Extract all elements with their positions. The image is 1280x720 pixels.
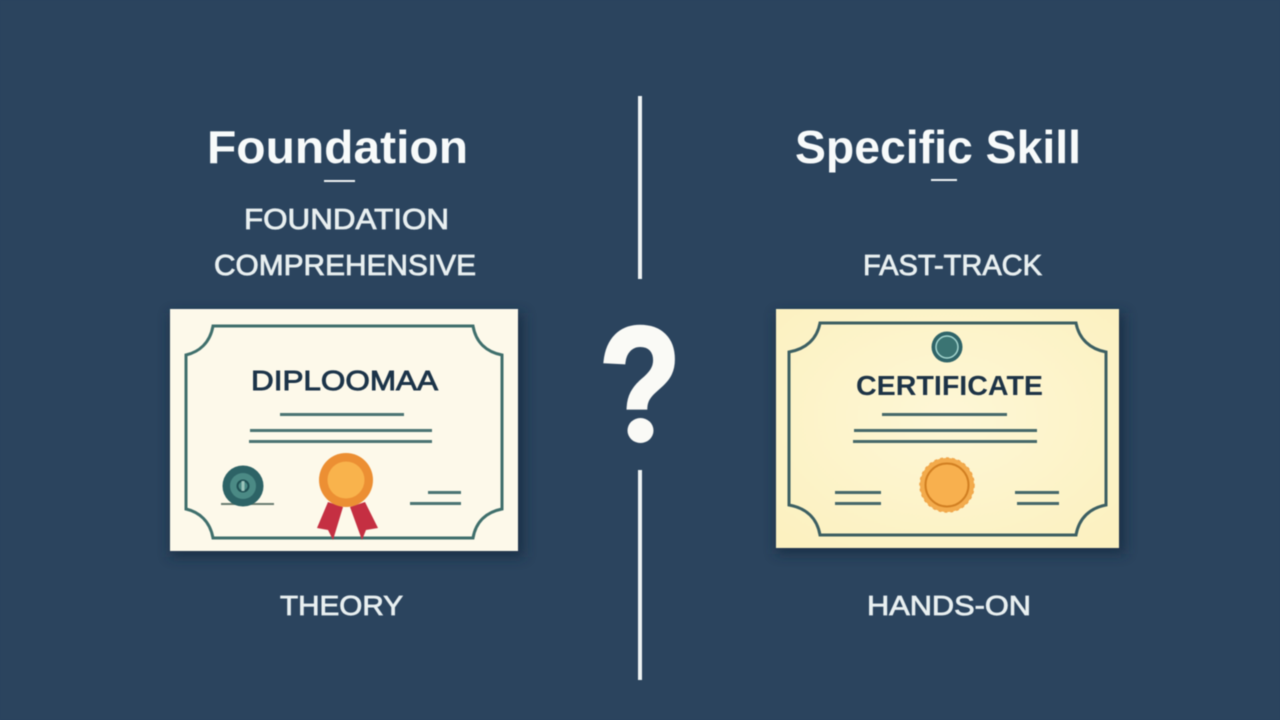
icon: question mark: ? <box>599 293 681 477</box>
icon: orange seal <box>920 458 974 512</box>
panel: certificate card <box>776 309 1125 554</box>
signature lines <box>835 491 1059 505</box>
certificate ornate border <box>789 323 1106 535</box>
central divider: upper line <box>638 96 642 279</box>
icon: question mark <box>602 324 676 444</box>
certificate title: CERTIFICATE <box>856 370 1043 401</box>
left column footer: THEORY: THEORY <box>280 590 403 621</box>
diploma ornate border <box>186 326 502 538</box>
central divider: lower line <box>638 470 642 680</box>
right column label: FAST-TRACK: FAST-TRACK <box>863 250 1043 282</box>
left column label: COMPREHENSIVE: COMPREHENSIVE <box>214 250 476 282</box>
icon: green stamp seal <box>221 466 274 506</box>
panel: diploma certificate card <box>170 309 524 557</box>
left column label: FOUNDATION: FOUNDATION <box>244 204 449 236</box>
icon: orange rosette with red ribbon <box>317 453 378 540</box>
right column heading: Specific Skill: Specific Skill <box>795 121 1081 173</box>
diploma text lines <box>249 413 432 443</box>
certificate text lines <box>853 413 1037 443</box>
left column heading: Foundation: Foundation <box>207 121 468 173</box>
signature lines <box>410 491 461 505</box>
icon: teal seal <box>932 332 962 362</box>
diploma title: DIPLOOMAA <box>251 365 438 396</box>
right column footer: HANDS-ON: HANDS-ON <box>867 590 1031 621</box>
